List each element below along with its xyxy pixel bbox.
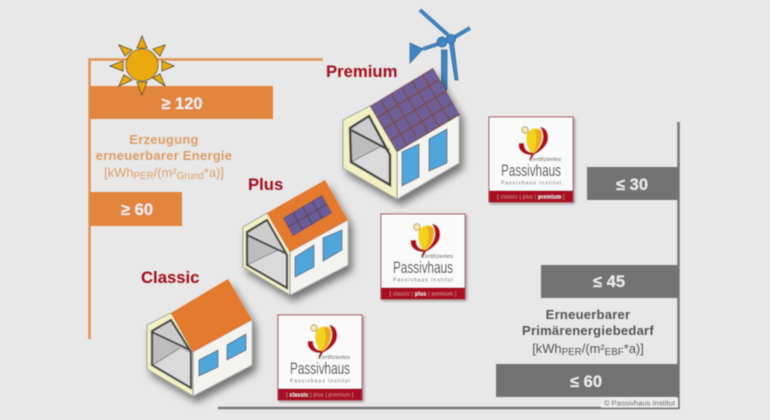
text: generation caption: [kWh (104, 165, 134, 180)
logo (411, 224, 440, 257)
text: generation caption: Grund (177, 171, 204, 182)
bar: demand 60 (496, 364, 678, 397)
badge: classic: [ classic | plus | premium ] (286, 392, 354, 398)
icon: wind turbine (410, 10, 470, 90)
windows (295, 230, 342, 277)
house: Classic (147, 279, 252, 396)
axis: primary energy demand (218, 122, 678, 408)
text: generation caption: *a)] (204, 165, 224, 180)
bar: generation 120 (90, 86, 273, 119)
solar panels (371, 69, 459, 151)
badge: premium: Passivhaus (501, 161, 561, 180)
badge: premium: [ classic | plus | premium ] (497, 194, 565, 200)
opening (350, 116, 390, 185)
bar: demand 45 (541, 265, 678, 298)
badge: premium: Passivhaus Institut (501, 180, 562, 186)
opening (247, 220, 287, 288)
badge: classic (278, 315, 362, 400)
text: generation caption: /(m² (154, 165, 177, 180)
label: Premium: Premium (326, 62, 397, 81)
text: demand caption: EBF (605, 347, 624, 358)
badge: plus: Zertifiziertes (421, 254, 453, 260)
text: demand caption: /(m² (582, 341, 605, 356)
bar: demand 30 (587, 167, 678, 200)
text: demand caption: Erneuerbarer (546, 307, 630, 322)
badge: plus: Passivhaus (393, 258, 453, 277)
label: Classic: Classic (141, 268, 199, 287)
text: demand caption: [kWh (532, 341, 562, 356)
solar panels (283, 195, 332, 236)
badge: premium: Zertifiziertes (529, 157, 561, 163)
house: Plus (243, 180, 348, 295)
text: generation caption: Erzeugung (129, 132, 199, 147)
text: demand caption (522, 307, 654, 358)
text: generation caption: PER (134, 171, 154, 182)
logo (308, 325, 337, 358)
badge: plus (381, 214, 465, 299)
text: demand caption: PER (562, 347, 582, 358)
text: generation caption (96, 132, 232, 182)
text: demand caption: Primärenergiebedarf (522, 323, 654, 338)
bar: demand 30: ≤ 30 (616, 176, 648, 194)
house: Premium (343, 68, 460, 199)
bar: demand 45: ≤ 45 (593, 273, 625, 291)
opening (152, 320, 191, 388)
bar: generation 120: ≥ 120 (161, 95, 203, 113)
copyright: © Passivhaus Institut (604, 398, 676, 408)
bar: generation 60 (90, 192, 182, 226)
icon: sun (110, 36, 174, 95)
text: demand caption: *a)] (624, 341, 644, 356)
label: Plus: Plus (248, 175, 283, 194)
bar: demand 60: ≤ 60 (570, 373, 602, 391)
badge: classic: Passivhaus (290, 359, 350, 378)
windows (402, 129, 447, 186)
badge: plus: [ classic | plus | premium ] (390, 292, 457, 298)
badge: classic: Zertifiziertes (318, 355, 350, 361)
text: generation caption: erneuerbarer Energie (96, 148, 232, 163)
logo (519, 127, 548, 160)
bar: generation 60: ≥ 60 (121, 201, 153, 219)
windows (199, 334, 246, 376)
badge: plus: Passivhaus Institut (393, 278, 454, 284)
badge: classic: Passivhaus Institut (290, 378, 351, 384)
axis: renewable generation (90, 60, 323, 339)
badge: premium (489, 117, 573, 202)
